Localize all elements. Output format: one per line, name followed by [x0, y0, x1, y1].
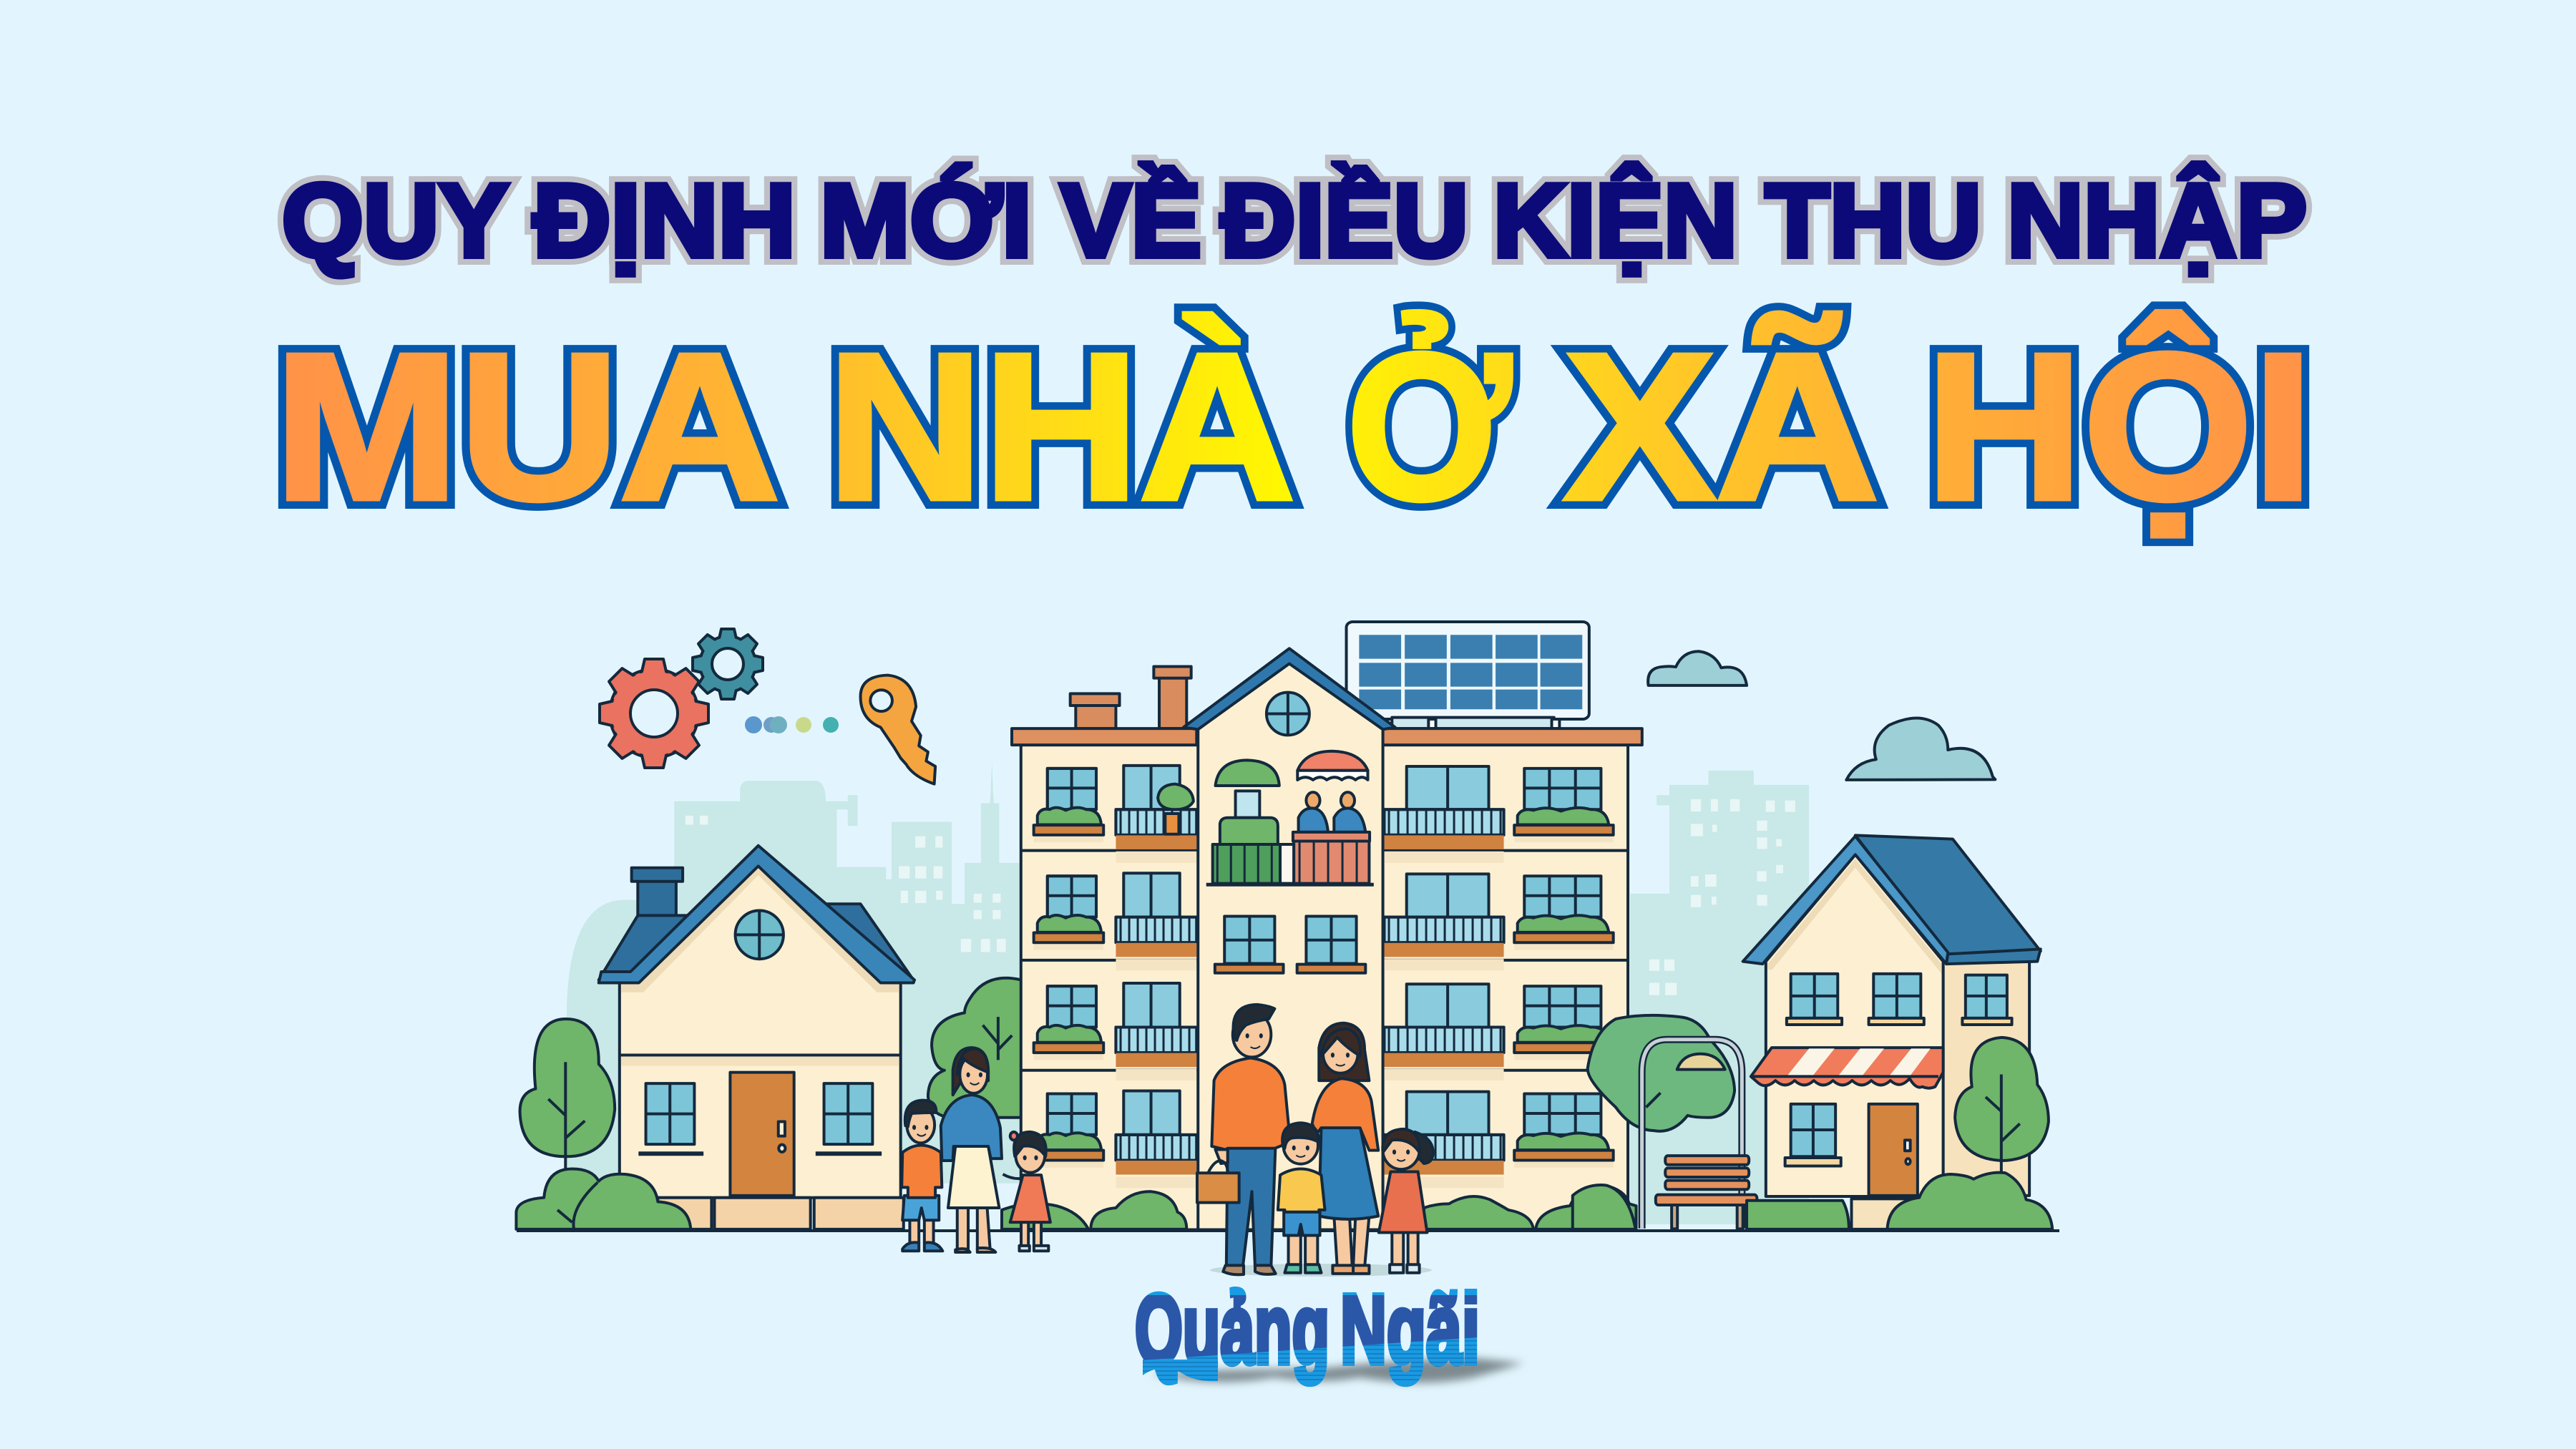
shrubs at building base — [1002, 1185, 1636, 1229]
father — [1197, 1005, 1290, 1274]
title line 2: Ở — [1347, 309, 1513, 543]
son — [1278, 1123, 1325, 1273]
windows — [638, 1083, 882, 1153]
door — [1869, 1104, 1918, 1196]
background city skyline — [567, 762, 1809, 1224]
logo wave — [1143, 1360, 1218, 1381]
title line 1: QUY — [282, 162, 509, 278]
right park: tree, lamp and bench — [1573, 1015, 1849, 1229]
title line 1: KIỆN — [1493, 162, 1737, 278]
steps — [658, 1198, 904, 1229]
icon: teal gear — [693, 629, 763, 699]
left wing — [1012, 728, 1199, 1229]
title line 2: HỘI — [1926, 309, 2313, 543]
connecting dots — [745, 716, 839, 733]
title line 2: MUA — [274, 310, 780, 543]
central tower — [1184, 648, 1395, 1229]
title line 1: NHẬP — [2007, 162, 2307, 278]
title line 1: ĐIỀU — [1221, 162, 1468, 278]
left tree — [520, 1019, 615, 1169]
cloud large — [1846, 718, 1995, 780]
shadow under central family — [1210, 1264, 1432, 1277]
title line 2: Ở — [1347, 309, 1513, 543]
title line 1: VỀ — [1060, 162, 1201, 278]
windows — [1791, 974, 2007, 1156]
chimneys — [1070, 667, 1191, 728]
title line 1: MỚI — [820, 162, 1032, 278]
door — [730, 1073, 794, 1196]
boy — [902, 1101, 942, 1251]
logo: Quảng Ngãi newspaper — [1135, 1274, 1524, 1385]
shrubs — [1573, 1185, 1849, 1229]
icon: key — [861, 675, 935, 784]
title line 1: ĐỊNH — [533, 162, 796, 278]
ground line — [517, 1229, 2059, 1232]
title line 1: MỚI — [820, 162, 1032, 278]
title line 1: THU — [1765, 162, 1981, 278]
title line 1: THU — [1765, 162, 1981, 278]
cloud small — [1648, 651, 1747, 686]
title line 2 — [274, 309, 2313, 543]
red balcony with residents — [1280, 751, 1370, 884]
logo shadow — [1150, 1358, 1524, 1382]
logo wordmark: Ngãi — [1340, 1274, 1480, 1385]
title line 1: NHẬP — [2007, 162, 2307, 278]
mother — [1312, 1023, 1378, 1274]
mother — [941, 1048, 1002, 1252]
title line 2: HỘI — [1926, 309, 2313, 543]
title line 2: NHÀ — [827, 310, 1295, 543]
central family — [1197, 1005, 1433, 1274]
green balcony — [1213, 760, 1280, 884]
logo wordmark: Quảng — [1135, 1274, 1330, 1385]
apartment building — [1002, 622, 1642, 1229]
street lamp arch — [1642, 1040, 1742, 1229]
title line 1: QUY — [282, 162, 509, 278]
girl — [1003, 1132, 1050, 1251]
tree behind family — [928, 978, 1021, 1118]
icon: red gear — [600, 659, 708, 768]
right house — [1743, 835, 2052, 1229]
roof — [599, 846, 914, 982]
title line 1 — [282, 162, 2307, 278]
chimney — [632, 868, 683, 916]
bag — [1197, 1161, 1239, 1203]
title line 1: KIỆN — [1493, 162, 1737, 278]
title line 2: NHÀ — [827, 310, 1295, 543]
family on the left — [902, 1048, 1050, 1252]
shop awning — [1751, 1048, 1943, 1088]
daughter — [1379, 1129, 1433, 1273]
title line 2: XÃ — [1564, 310, 1879, 543]
solar panel — [1347, 622, 1589, 728]
title line 1: VỀ — [1060, 162, 1201, 278]
title line 2: MUA — [274, 310, 780, 543]
right wing — [1383, 728, 1642, 1229]
right tree — [1955, 1038, 2049, 1173]
left house — [516, 846, 914, 1229]
title line 2: XÃ — [1564, 310, 1879, 543]
bench — [1656, 1156, 1757, 1229]
title line 1: ĐIỀU — [1221, 162, 1468, 278]
park tree — [1588, 1015, 1735, 1131]
title line 1: ĐỊNH — [533, 162, 796, 278]
